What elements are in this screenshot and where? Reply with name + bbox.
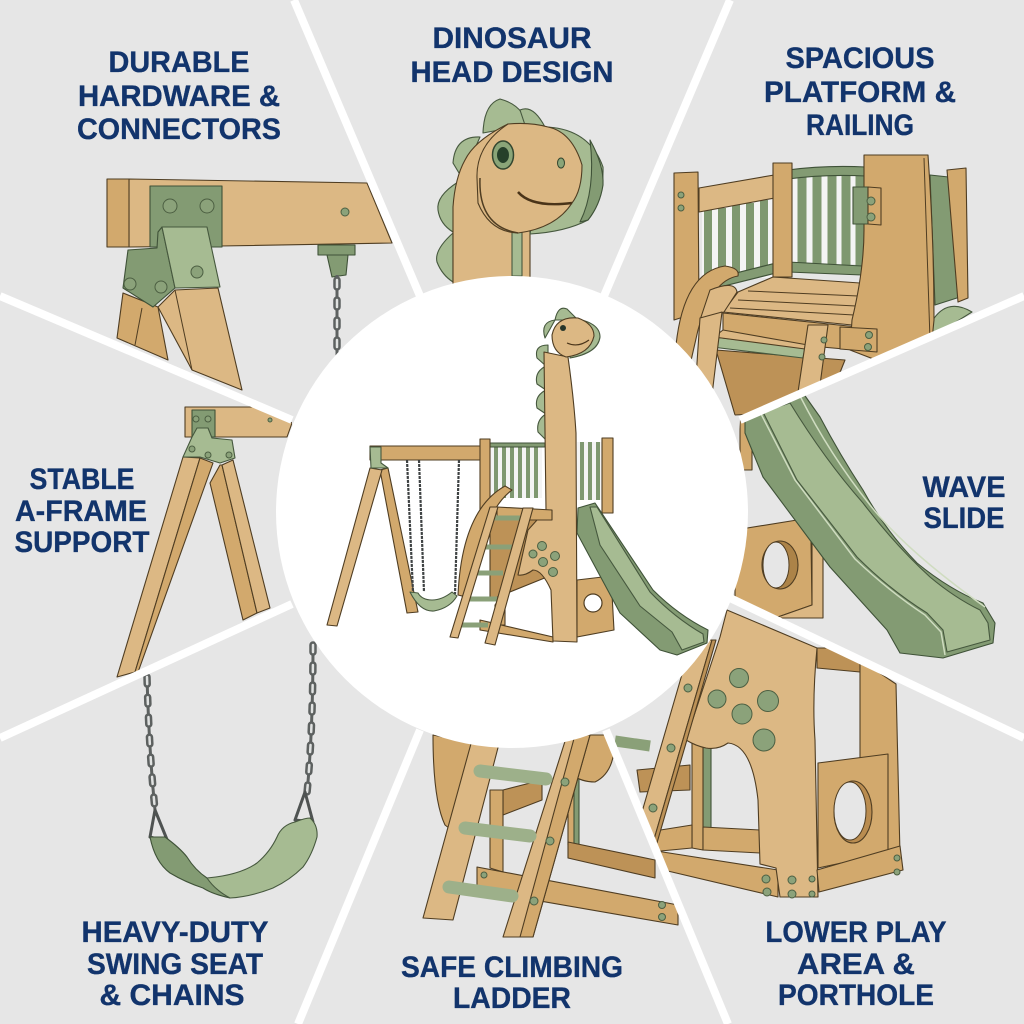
heading: durable hardware & connectors: HARDWARE & <box>78 80 280 113</box>
heading: stable a-frame support: A-FRAME <box>15 495 147 528</box>
panel: stable a-frame illustration <box>117 407 292 677</box>
dinosaur neck, body and head <box>497 308 600 642</box>
wave slide <box>577 503 708 655</box>
panel: lower play area illustration <box>615 610 903 898</box>
heading: durable hardware & connectors <box>77 46 281 146</box>
panel: heavy-duty swing seat illustration <box>147 645 317 898</box>
panel: wave slide illustration <box>735 393 995 658</box>
heading: durable hardware & connectors: CONNECTORS <box>77 113 281 146</box>
heading: lower play area & porthole <box>766 916 946 1012</box>
heading: lower play area & porthole: PORTHOLE <box>778 979 934 1012</box>
heading: spacious platform & railing: PLATFORM & <box>764 76 956 109</box>
swing a-frame <box>327 446 482 626</box>
heading: stable a-frame support: STABLE <box>30 463 134 496</box>
panel: spacious platform illustration <box>674 155 972 415</box>
panel: durable hardware illustration <box>107 179 392 390</box>
heading: stable a-frame support: SUPPORT <box>14 526 150 559</box>
heading: spacious platform & railing: RAILING <box>806 109 914 142</box>
platform railings <box>480 438 613 520</box>
heading: heavy-duty swing seat & chains: SWING SEAT <box>87 948 263 981</box>
center circle with full playset <box>276 276 748 748</box>
heading: durable hardware & connectors: DURABLE <box>108 46 250 79</box>
heading: dinosaur head design <box>410 22 614 89</box>
heading: safe climbing ladder: LADDER <box>453 982 571 1015</box>
climbing ladder <box>450 486 533 645</box>
heading: wave slide: SLIDE <box>924 502 1004 535</box>
heading: wave slide: WAVE <box>922 471 1006 504</box>
heading: safe climbing ladder: SAFE CLIMBING <box>401 951 623 984</box>
heading: heavy-duty swing seat & chains: & CHAINS <box>100 979 244 1012</box>
heading: spacious platform & railing: SPACIOUS <box>786 42 934 75</box>
heading: safe climbing ladder <box>401 951 623 1015</box>
heading: dinosaur head design: HEAD DESIGN <box>410 56 614 89</box>
heading: spacious platform & railing <box>764 42 956 142</box>
lower structure <box>480 518 614 642</box>
heading: dinosaur head design: DINOSAUR <box>432 22 592 55</box>
heading: stable a-frame support <box>14 463 150 559</box>
heading: heavy-duty swing seat & chains <box>82 916 268 1012</box>
heading: wave slide <box>922 471 1006 535</box>
panel: safe climbing ladder illustration <box>423 735 678 937</box>
heading: lower play area & porthole: LOWER PLAY <box>766 916 946 949</box>
panel: dinosaur head illustration <box>437 99 603 290</box>
heading: heavy-duty swing seat & chains: HEAVY-DUTY <box>82 916 268 949</box>
swing chains and seat <box>407 460 459 611</box>
heading: lower play area & porthole: AREA & <box>797 948 915 981</box>
